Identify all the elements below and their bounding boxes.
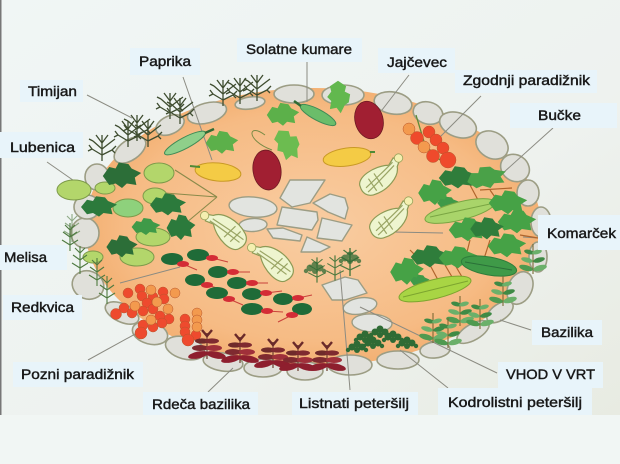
plants: early tomatoes xyxy=(403,115,456,168)
plants: eggplants xyxy=(250,98,387,192)
plants: curly parsley xyxy=(346,326,418,353)
label: Bazilika xyxy=(532,320,602,345)
plants: watermelon xyxy=(57,162,217,266)
leader lines xyxy=(47,62,553,392)
label: Melisa xyxy=(0,245,67,270)
plants: late tomatoes xyxy=(110,284,202,346)
label: Pozni paradižnik xyxy=(13,362,143,387)
label: Jajčevec xyxy=(378,48,455,73)
label: VHOD V VRT: VHOD V VRT xyxy=(506,366,595,382)
plants: yellow peppers xyxy=(190,145,375,183)
border stones xyxy=(68,85,551,380)
label: Timijan: Timijan xyxy=(28,83,77,99)
label: Komarček xyxy=(538,215,620,250)
label: Lubenica xyxy=(0,132,83,158)
label: Zgodnji paradižnik: Zgodnji paradižnik xyxy=(463,72,591,88)
label: Melisa: Melisa xyxy=(4,249,47,265)
label: Solatne kumare: Solatne kumare xyxy=(246,41,352,57)
label: Rdeča bazilika xyxy=(143,392,258,415)
label: VHOD V VRT xyxy=(498,362,603,388)
plants: flat-leaf parsley xyxy=(304,248,361,283)
label: Listnati peteršilj xyxy=(292,392,418,415)
plants: cucumbers with leaves xyxy=(162,81,350,165)
plants: zucchini with leaves xyxy=(390,163,538,307)
plants: thyme xyxy=(88,75,271,161)
plants: basil xyxy=(419,244,547,348)
label: Lubenica: Lubenica xyxy=(10,139,75,155)
label: Rdeča bazilika: Rdeča bazilika xyxy=(152,396,250,412)
central stepping stones xyxy=(228,180,392,333)
label: Bazilika: Bazilika xyxy=(541,324,593,340)
label: Paprika: Paprika xyxy=(139,53,191,69)
label: Bučke: Bučke xyxy=(538,107,581,123)
plants: melisa xyxy=(62,214,115,304)
label: Pozni paradižnik: Pozni paradižnik xyxy=(21,366,135,382)
label: Kodrolistni peteršilj: Kodrolistni peteršilj xyxy=(448,394,582,410)
label: Komarček: Komarček xyxy=(547,225,617,241)
label: Paprika xyxy=(130,48,200,75)
label: Kodrolistni peteršilj xyxy=(438,388,592,415)
label: Zgodnji paradižnik xyxy=(455,70,597,93)
label: Jajčevec: Jajčevec xyxy=(387,54,447,70)
plants: radishes xyxy=(161,249,312,322)
label: Solatne kumare xyxy=(237,38,362,62)
label: Listnati peteršilj: Listnati peteršilj xyxy=(299,395,409,411)
plants: fennel xyxy=(199,152,422,289)
label: Timijan xyxy=(20,80,83,102)
garden bed: orange soil xyxy=(85,88,541,366)
label: Redkvica xyxy=(3,295,82,320)
label: Redkvica: Redkvica xyxy=(11,299,74,315)
plants: red basil xyxy=(188,330,346,372)
label: Bučke xyxy=(510,103,617,128)
